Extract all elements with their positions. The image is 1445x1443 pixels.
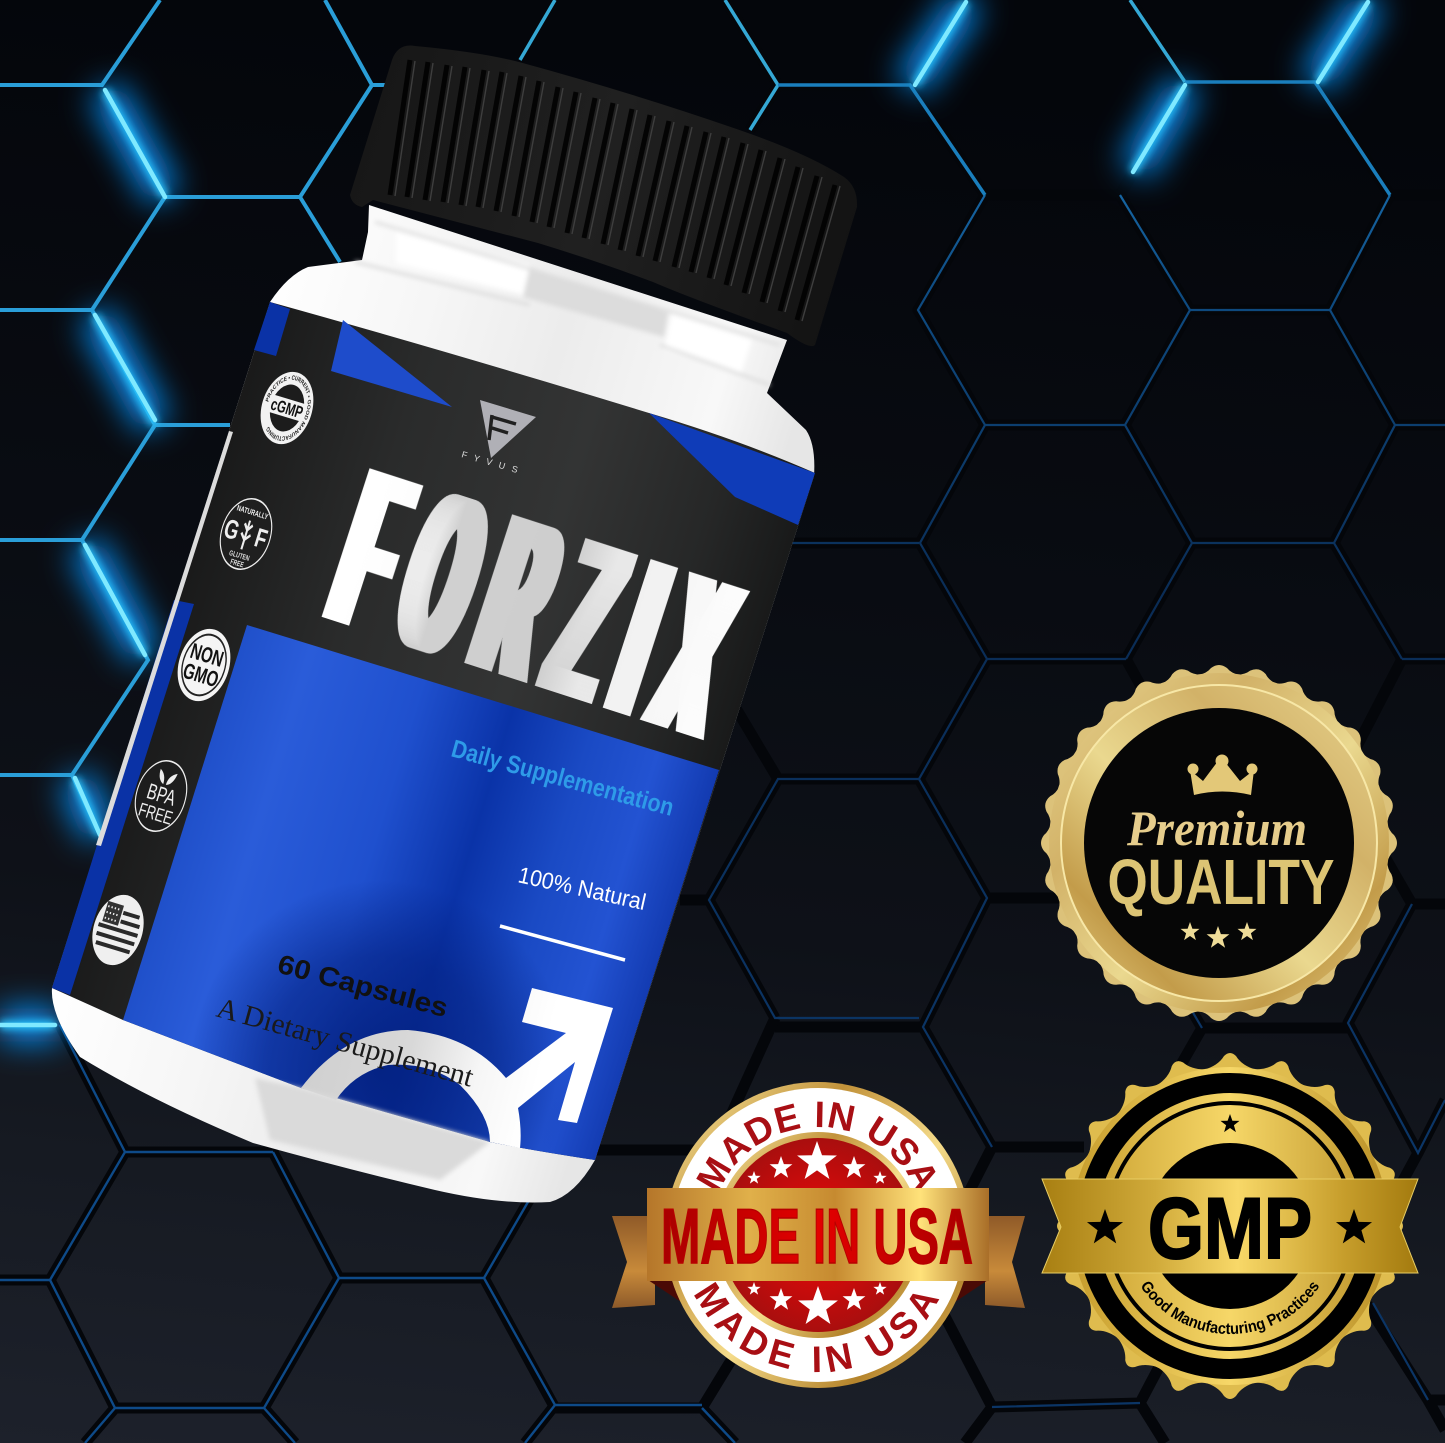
daily supplementation text: Daily Supplementation <box>448 735 677 822</box>
dietary supplement text: A Dietary Supplement <box>213 992 477 1094</box>
outer gold ring <box>665 1082 971 1388</box>
label: main blue panel <box>123 625 719 1160</box>
label: top left blue tab <box>254 302 290 356</box>
fyvus logo: FYVUS <box>460 449 526 477</box>
stars <box>747 1141 887 1324</box>
label: black wrap <box>52 302 815 1160</box>
cap rib highlights <box>395 61 840 321</box>
thin black ring <box>1107 1103 1353 1349</box>
label: blue panel shadow <box>123 625 719 1160</box>
top arc text: MADE IN USA <box>696 1102 936 1188</box>
black ring <box>1087 1083 1373 1369</box>
icon: gluten free: FREE <box>229 558 245 570</box>
label: left blue strip <box>52 600 194 995</box>
crown <box>1188 754 1258 795</box>
main ribbon <box>647 1188 989 1281</box>
ribbon stars <box>1087 1209 1123 1243</box>
gold disc <box>1049 673 1389 1013</box>
glowing hexagon lines: mid blue segments <box>0 0 1390 1025</box>
inner gold band <box>1061 685 1377 1001</box>
neck shading <box>355 222 780 385</box>
badge: made in usa <box>612 1082 1025 1388</box>
label: right blue corner <box>649 413 815 525</box>
glowing hexagon lines: bright core <box>0 2 1368 1025</box>
good manufacturing practices text: Good Manufacturing Practices <box>1142 1282 1318 1334</box>
icon: gluten free: NATURALLY <box>236 505 269 522</box>
cap rib shadows <box>390 60 835 320</box>
label: blue triangle <box>331 320 452 407</box>
badge: gmp <box>1041 1053 1419 1399</box>
ribbon tails <box>612 1216 1025 1308</box>
three stars <box>1180 922 1256 948</box>
toothed gold edge <box>1057 1053 1403 1399</box>
icon: gluten free: GLUTEN <box>228 549 251 563</box>
icon: gluten free: F <box>251 522 271 554</box>
top star <box>1220 1114 1240 1132</box>
male symbol <box>301 988 613 1148</box>
black center <box>1147 1143 1313 1309</box>
icon: bpa free: FREE <box>136 799 175 829</box>
gmp text: GMP <box>1148 1181 1312 1277</box>
icon: bpa free: BPA <box>144 779 179 811</box>
ribbon <box>1042 1179 1418 1273</box>
gold disc <box>1071 1067 1389 1385</box>
glowing hexagon lines: soft bloom <box>0 2 1368 1025</box>
icon: non gmo seal: GMO <box>180 658 222 692</box>
bottom arc text: MADE IN USA <box>694 1282 940 1372</box>
black center <box>1084 708 1354 978</box>
icon: cGMP seal: PRACTICE • CURRENT • GOOD MANUFACTURING <box>266 375 311 441</box>
premium text: Premium <box>1126 800 1307 856</box>
red disc <box>721 1138 915 1332</box>
icon: gluten free <box>212 492 280 576</box>
label: silver edge sliver <box>96 431 233 846</box>
inner gold ring <box>715 1132 921 1338</box>
ring <box>1061 685 1377 1001</box>
screw cap <box>350 46 857 346</box>
icon: cGMP seal: cGMP <box>268 396 305 423</box>
glowing hexagon lines: halo <box>0 0 1370 1025</box>
bottom rim shading <box>255 1078 490 1180</box>
ribbon text: MADE IN USA <box>661 1192 973 1280</box>
scalloped gold edge <box>1041 665 1397 1021</box>
icon: non gmo seal <box>169 622 239 708</box>
quality text: QUALITY <box>1108 846 1334 918</box>
white ring <box>671 1088 965 1382</box>
fyvus logo <box>460 400 536 477</box>
white rule <box>500 926 625 960</box>
bottle body <box>52 205 814 1202</box>
icon: bpa free <box>127 754 195 838</box>
capsule count: 60 Capsules <box>274 949 451 1023</box>
badge: premium quality <box>1041 665 1397 1021</box>
icon: non gmo seal: NON <box>188 638 227 671</box>
product name: FORZIX <box>310 423 780 790</box>
product bottle <box>52 46 857 1202</box>
natural text: 100% Natural <box>516 861 648 915</box>
icon: gluten free: G <box>221 513 243 546</box>
icon: american flag <box>84 888 152 972</box>
